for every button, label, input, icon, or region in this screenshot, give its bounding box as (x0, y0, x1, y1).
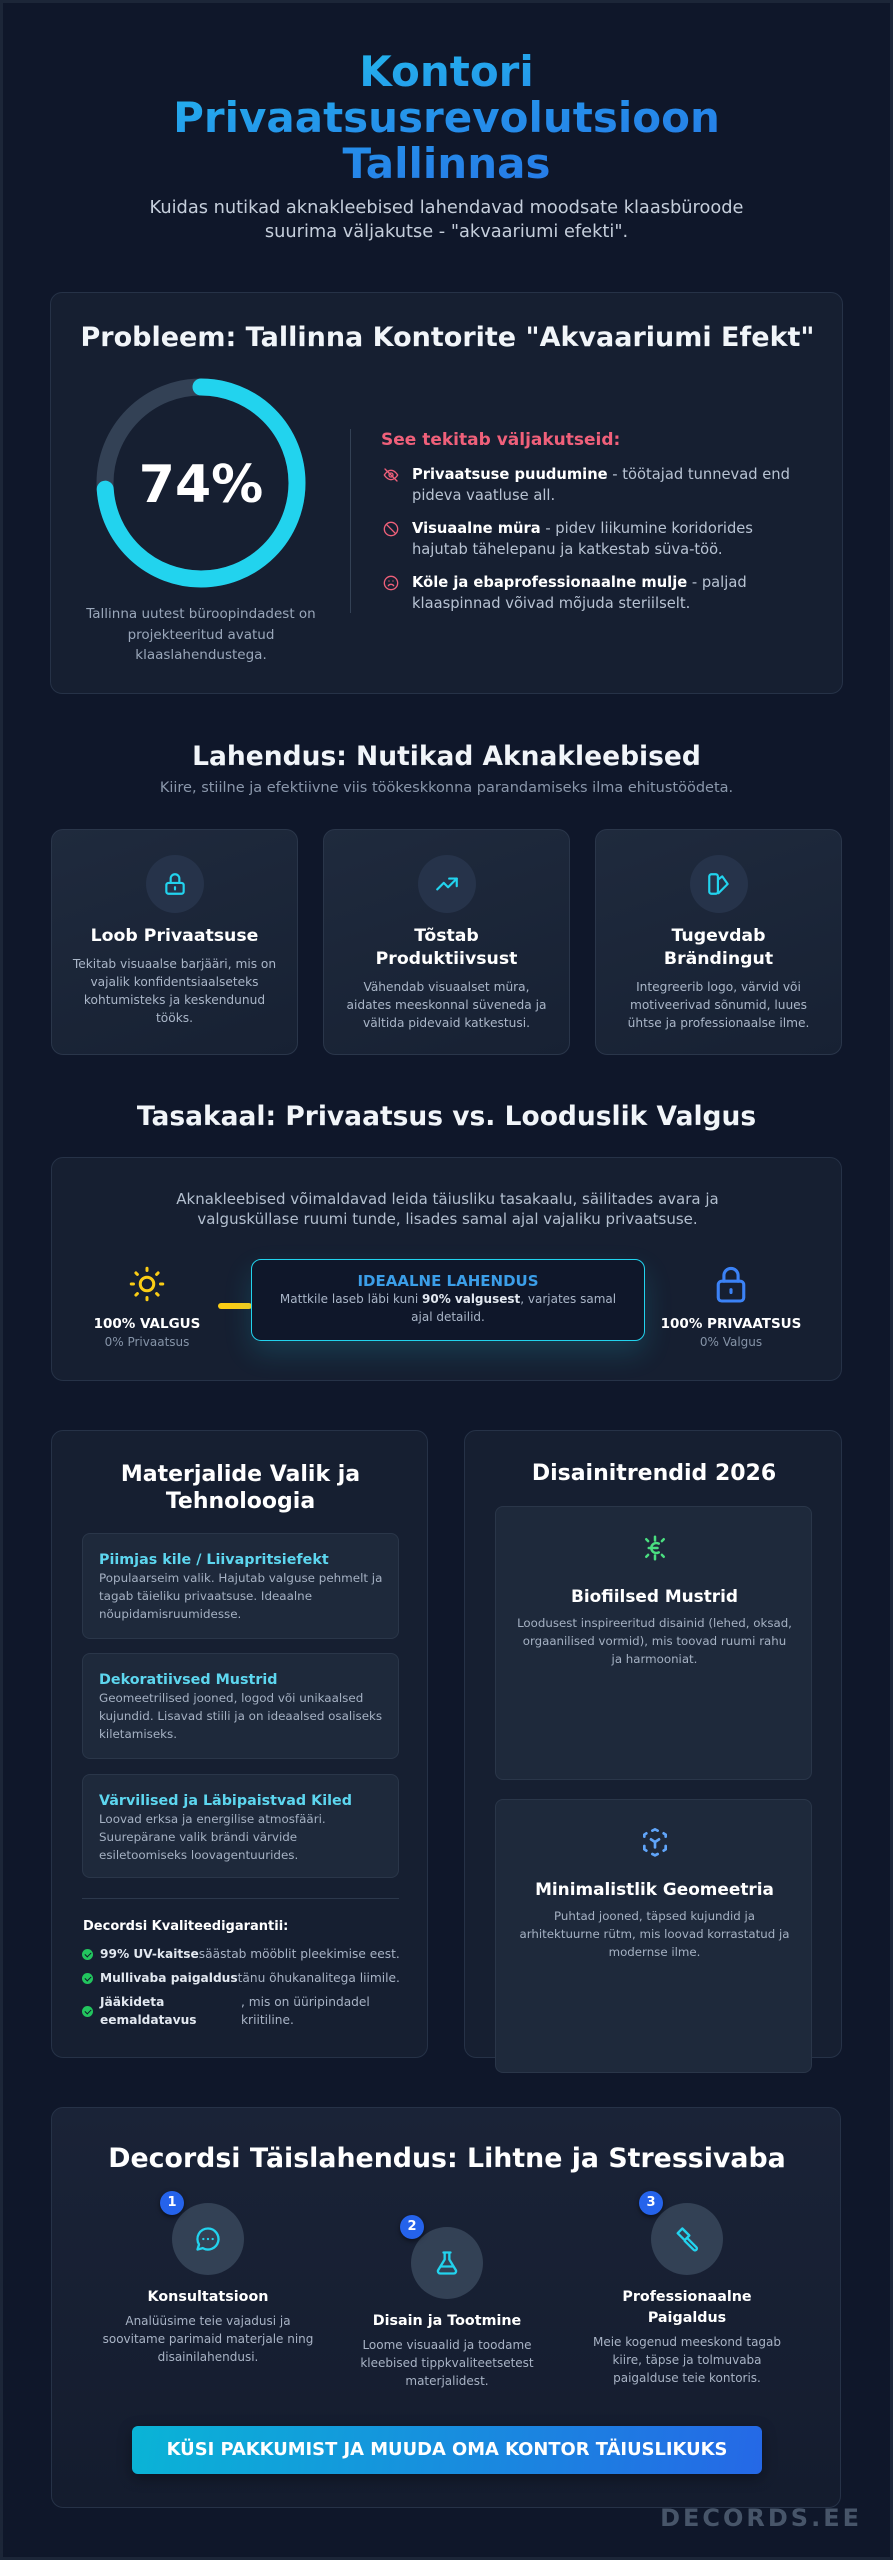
label: privacy: 100% PRIVAATSUS (661, 1316, 801, 1332)
step 1: consultation (103, 2191, 313, 2364)
card: biophilic (495, 1506, 812, 1780)
card: privacy: tööks. (156, 1010, 193, 1024)
item: cold impression: klaaspinnad võivad mõjuda steriilselt. (412, 595, 690, 612)
list: guarantees: tänu õhukanalitega liimile. (238, 1971, 400, 1985)
button: CTA: KÜSI PAKKUMIST JA MUUDA OMA KONTOR TÄIUSLIKUKS (167, 2439, 727, 2460)
heading: full service: Decordsi Täislahendus: Lihtne ja Stressivaba (108, 2143, 786, 2174)
card: colored: esiletoomiseks loovagentuurides. (99, 1848, 298, 1862)
panel: full service: 2 (407, 2219, 417, 2234)
list: guarantees: kriitiline. (241, 2013, 294, 2027)
card: frosted: tagab täieliku privaatsuse. Ideaalne (99, 1589, 312, 1603)
card: branding: motiveerivad sõnumid, luues (630, 998, 807, 1012)
icon: sun (130, 1266, 164, 1302)
card: productivity: vältida pidevaid katkestusi. (363, 1016, 530, 1030)
callout: ideal solution: IDEAALNE LAHENDUS (357, 1272, 539, 1290)
label: privacy: 0% Valgus (700, 1335, 762, 1349)
list: guarantees: Jääkideta (100, 1995, 164, 2009)
card: biophilic: Biofiilsed Mustrid (571, 1586, 738, 1606)
card: geometry: modernse ilme. (609, 1945, 700, 1959)
callout: ideal solution (251, 1259, 645, 1341)
card: privacy: vajalik konfidentsiaalseteks (90, 974, 259, 988)
heading: problem: Probleem: Tallinna Kontorite "Akvaariumi Efekt" (80, 322, 814, 353)
step 2: design: Loome visuaalid ja toodame (362, 2338, 532, 2352)
card: privacy: Loob Privaatsuse (91, 926, 258, 946)
callout: ideal solution: Mattkile laseb läbi kuni 90% valgusest, varjates samal (280, 1292, 616, 1306)
item: visual noise: hajutab tähelepanu ja katkestab süva-töö. (412, 541, 723, 558)
card: biophilic: orgaanilised vormid), mis toovad ruumi rahu (523, 1634, 786, 1648)
title: Privaatsusrevolutsioon (173, 93, 720, 142)
card: privacy (51, 829, 298, 1055)
label: light (94, 1316, 200, 1349)
card: decorative: Dekoratiivsed Mustrid (99, 1672, 278, 1688)
step 3: installation (593, 2191, 781, 2384)
label: privacy (661, 1316, 801, 1349)
item: visual noise (384, 520, 753, 558)
card: biophilic: ja harmooniat. (612, 1652, 697, 1666)
card: biophilic: Loodusest inspireeritud disainid (lehed, oksad, (517, 1616, 792, 1630)
step 3: installation: Meie kogenud meeskond tagab (593, 2334, 781, 2348)
text: balance intro: Aknakleebised võimaldavad leida täiusliku tasakaalu, säilitades avara ja (176, 1190, 719, 1208)
card: frosted: Piimjas kile / Liivapritsiefekt (99, 1552, 329, 1568)
panel: balance (51, 1157, 842, 1381)
card: geometry: Puhtad jooned, täpsed kujundid ja (554, 1909, 755, 1923)
subtitle (150, 197, 743, 242)
step 3: installation: kiire, täpse ja tolmuvaba (612, 2352, 762, 2366)
item: cold impression (384, 574, 747, 612)
step 2: design: kleebised tippkvaliteetsetest (360, 2356, 534, 2370)
icon: biophilic (644, 1536, 665, 1560)
step 2: design: materjalidest. (405, 2374, 489, 2388)
card: branding: Brändingut (664, 948, 773, 968)
card: colored (82, 1774, 399, 1878)
heading: materials: Tehnoloogia (166, 1488, 315, 1514)
card: colored: Loovad erksa ja energilise atmosfääri. (99, 1812, 326, 1826)
callout: ideal solution: ajal detailid. (411, 1310, 485, 1324)
subheading: solution: Kiire, stiilne ja efektiivne viis töökeskkonna parandamiseks ilma ehitustöödeta. (160, 780, 733, 796)
step 2: design (360, 2215, 534, 2388)
text: balance intro: valgusküllase ruumi tunde, lisades samal ajal vajaliku privaatsuse. (197, 1210, 698, 1228)
list: guarantees: eemaldatavus (100, 2013, 197, 2027)
card: geometry (495, 1799, 812, 2073)
heading: solution: Lahendus: Nutikad Aknakleebised (192, 741, 701, 772)
heading: challenges: See tekitab väljakutseid: (381, 430, 620, 450)
step 3: installation: Paigaldus (648, 2310, 726, 2326)
bar: light side (218, 1303, 252, 1309)
card: productivity: Tõstab (414, 926, 479, 946)
card: productivity (323, 829, 570, 1055)
panel: full service: paigalduse teie kontoris. (613, 2370, 761, 2384)
card: frosted: Populaarseim valik. Hajutab valguse pehmelt ja (99, 1571, 382, 1585)
card: colored: Suurepärane valik brändi värvide (99, 1830, 297, 1844)
card: privacy: Tekitab visuaalse barjääri, mis on (73, 956, 276, 970)
caption: ring: Tallinna uutest büroopindadest on (86, 606, 316, 622)
card: branding (595, 829, 842, 1055)
panel: problem (50, 292, 843, 694)
text: balance intro (176, 1190, 719, 1228)
card: branding: ühtse ja professionaalse ilme. (628, 1016, 809, 1030)
title (150, 49, 743, 187)
caption: ring: klaaslahendustega. (135, 647, 267, 663)
card: geometry: arhitektuurne rütm, mis loovad korrastatud ja (519, 1927, 790, 1941)
footer brand: DECORDS.EE (660, 2504, 862, 2532)
subtitle: Kuidas nutikad aknakleebised lahendavad moodsate klaasbüroode (150, 197, 743, 218)
heading: materials: Materjalide Valik ja (121, 1462, 360, 1486)
panel: trends (464, 1430, 842, 2058)
item: visual noise: Visuaalne müra - pidev liikumine koridorides (412, 520, 753, 537)
card: geometry: Minimalistlik Geomeetria (535, 1879, 774, 1899)
panel: materials (51, 1430, 428, 2058)
caption: ring: projekteeritud avatud (128, 626, 274, 642)
item: privacy: Privaatsuse puudumine - töötajad tunnevad end (412, 466, 790, 483)
panel: full service: 3 (646, 2195, 656, 2210)
step 1: consultation: Analüüsime teie vajadusi ja (125, 2314, 291, 2328)
card: colored: Värvilised ja Läbipaistvad Kiled (99, 1793, 352, 1809)
card: frosted (82, 1533, 399, 1639)
subtitle: suurima väljakutse - "akvaariumi efekti". (265, 221, 628, 242)
step 2: design: Disain ja Tootmine (373, 2312, 521, 2328)
card: productivity: aidates meeskonnal süveneda ja (346, 998, 546, 1012)
card: frosted: nõupidamisruumidesse. (99, 1607, 241, 1621)
caption: ring (86, 606, 316, 663)
list: guarantees: 99% UV-kaitse (100, 1947, 199, 1961)
card: decorative: Geomeetrilised jooned, logod või unikaalsed (99, 1691, 363, 1705)
button: CTA (132, 2426, 762, 2474)
card: privacy: kohtumisteks ja keskendunud (84, 992, 265, 1006)
label: light: 0% Privaatsus (105, 1335, 189, 1349)
icon: lock (146, 855, 204, 913)
list: guarantees: säästab mööblit pleekimise eest. (199, 1947, 400, 1961)
chart: 74% ring: 74% (139, 455, 263, 515)
card: branding: Tugevdab (672, 926, 765, 946)
title: Kontori (359, 47, 534, 96)
icon: swatch (690, 855, 748, 913)
panel: full service (51, 2107, 841, 2508)
heading: trends: Disainitrendid 2026 (532, 1460, 776, 1486)
chart: 74% ring (96, 378, 306, 588)
list: guarantees: Mullivaba paigaldus (100, 1971, 238, 1985)
icon: trend (418, 855, 476, 913)
heading: balance: Tasakaal: Privaatsus vs. Looduslik Valgus (137, 1101, 756, 1132)
step 1: consultation: disainilahendusi. (158, 2350, 258, 2364)
step 1: consultation: Konsultatsioon (148, 2288, 268, 2304)
item: cold impression: Köle ja ebaprofessionaalne mulje - paljad (412, 574, 747, 591)
heading: materials (121, 1462, 360, 1514)
list: guarantees: , mis on üüripindadel (241, 1995, 370, 2009)
label: light: 100% VALGUS (94, 1316, 200, 1332)
item: privacy (384, 466, 790, 504)
card: branding: Integreerib logo, värvid või (636, 980, 801, 994)
card: decorative (82, 1653, 399, 1759)
icon: lock blue (716, 1266, 746, 1302)
card: productivity: Produktiivsust (376, 948, 517, 968)
step 1: consultation: soovitame parimaid materjale ning (103, 2332, 313, 2346)
card: decorative: kujundid. Lisavad stiili ja on ideaalsed osaliseks (99, 1709, 382, 1723)
step 3: installation: Professionaalne (622, 2288, 752, 2304)
icon: geometry (643, 1828, 667, 1857)
item: privacy: pideva vaatluse all. (412, 487, 555, 504)
title: Tallinnas (343, 139, 550, 188)
card: decorative: kiletamiseks. (99, 1727, 177, 1741)
card: productivity: Vähendab visuaalset müra, (363, 980, 530, 994)
list: guarantees (82, 1947, 400, 2027)
panel: full service: 1 (167, 2195, 177, 2210)
list: challenges (384, 466, 790, 612)
heading: quality guarantee: Decordsi Kvaliteedigarantii: (83, 1919, 288, 1934)
